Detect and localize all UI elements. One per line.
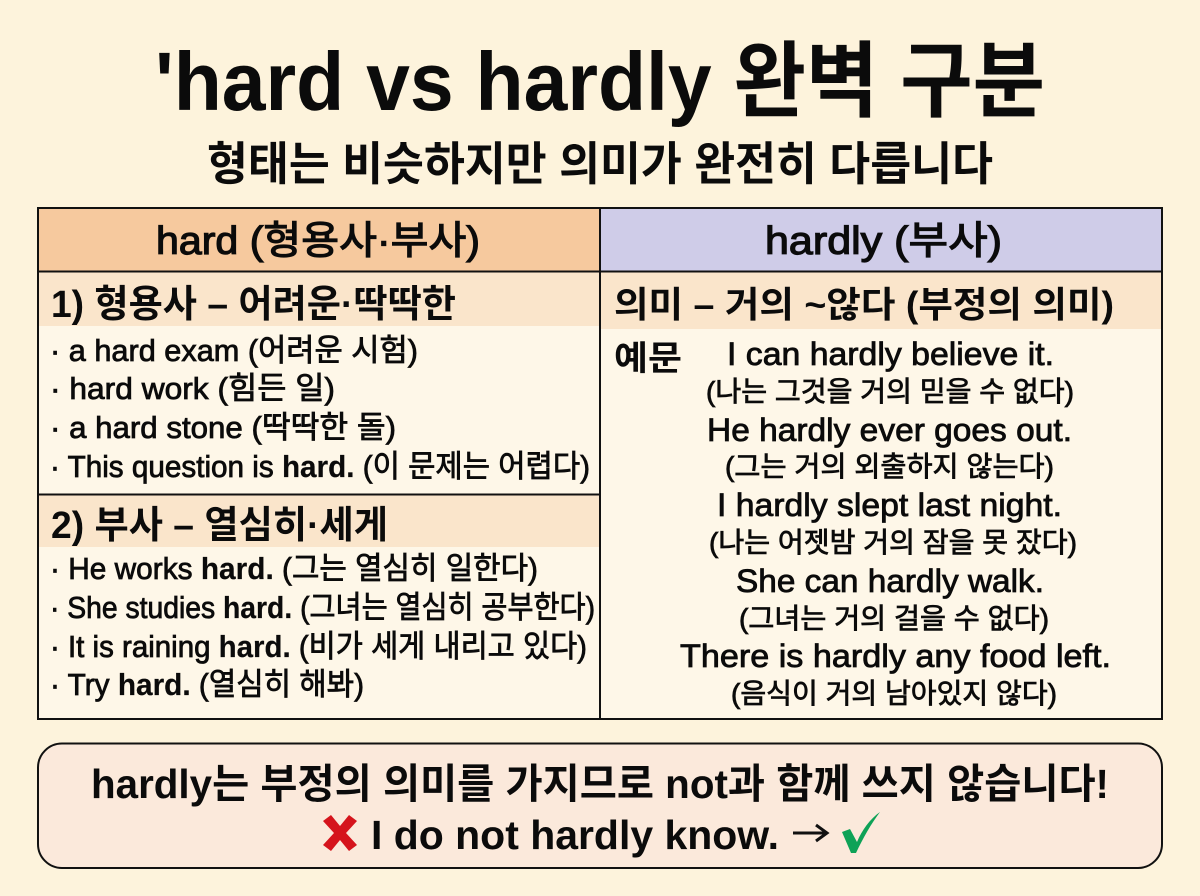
hardly examples: (그녀는 거의 걸을 수 없다)	[739, 603, 1049, 634]
title: 'hard vs hardly 완벽 구분	[155, 35, 1045, 128]
hardly examples: I can hardly believe it.	[727, 336, 1054, 372]
hardly examples: I hardly slept last night.	[717, 487, 1062, 523]
adverb examples: · He works hard. (그는 열심히 일한다)	[50, 551, 538, 586]
adjective examples: · This question is hard. (이 문제는 어렵다)	[50, 449, 590, 484]
adjective examples: · hard work (힘든 일)	[50, 371, 335, 406]
panel: hardly header: hardly (부사)	[765, 220, 1002, 263]
icon: red cross	[323, 815, 357, 851]
hardly examples: (나는 그것을 거의 믿을 수 없다)	[706, 376, 1074, 407]
heading: hardly meaning: 의미 – 거의 ~않다 (부정의 의미)	[614, 284, 1114, 325]
panel: hard header: hard (형용사·부사)	[156, 220, 480, 263]
heading: adverb: 2) 부사 – 열심히·세게	[51, 505, 388, 547]
hardly examples: (나는 어젯밤 거의 잠을 못 잤다)	[709, 527, 1077, 558]
adverb examples: · She studies hard. (그녀는 열심히 공부한다)	[50, 590, 595, 625]
comparison table	[38, 208, 1162, 719]
hardly examples: (그는 거의 외출하지 않는다)	[725, 451, 1054, 482]
icon: green check	[842, 812, 880, 853]
panel: hard header	[38, 208, 600, 271]
wrong example text: I do not hardly know.	[371, 812, 779, 858]
arrow	[793, 825, 827, 841]
adverb examples	[50, 551, 595, 702]
hardly examples	[680, 336, 1111, 709]
panel: hardly header	[600, 208, 1162, 271]
heading: adjective: 1) 형용사 – 어려운·딱딱한	[51, 284, 456, 326]
hardly examples: She can hardly walk.	[736, 563, 1044, 599]
panel: adverb section	[39, 495, 600, 702]
subtitle: 형태는 비슷하지만 의미가 완전히 다릅니다	[207, 138, 993, 190]
adjective examples: · a hard stone (딱딱한 돌)	[50, 410, 396, 445]
adjective examples	[50, 333, 590, 484]
callout rule text: hardly는 부정의 의미를 가지므로 not과 함께 쓰지 않습니다!	[91, 761, 1109, 807]
adjective examples: · a hard exam (어려운 시험)	[50, 333, 418, 368]
callout	[38, 744, 1162, 868]
label: examples: 예문	[614, 340, 682, 378]
adverb examples: · Try hard. (열심히 해봐)	[50, 667, 364, 702]
panel: adjective section	[39, 272, 600, 484]
hardly examples: He hardly ever goes out.	[707, 412, 1072, 448]
hardly examples: (음식이 거의 남아있지 않다)	[731, 678, 1057, 709]
panel: hardly meaning and examples	[601, 272, 1162, 709]
adverb examples: · It is raining hard. (비가 세게 내리고 있다)	[50, 629, 587, 664]
hardly examples: There is hardly any food left.	[680, 638, 1111, 674]
